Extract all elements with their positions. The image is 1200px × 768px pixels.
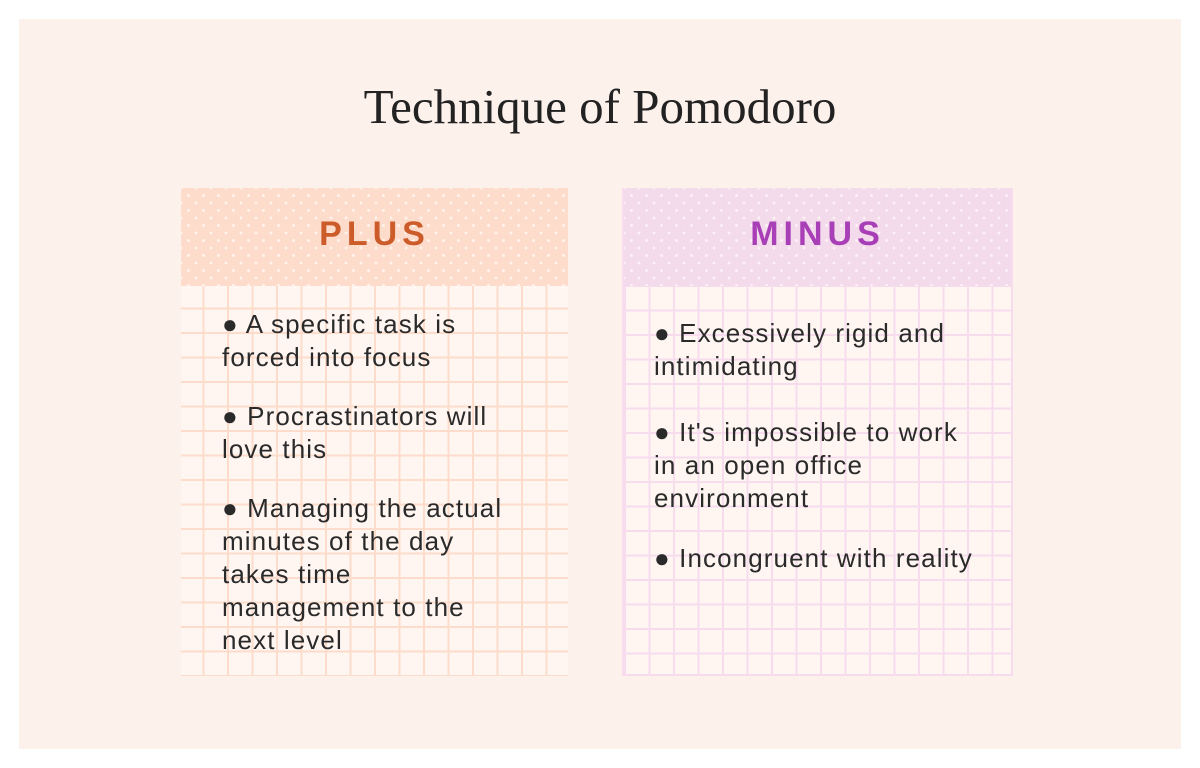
minus header bbox=[624, 188, 1011, 286]
plus items: ● A specific task is bbox=[222, 309, 456, 339]
plus items: ● Managing the actual bbox=[222, 493, 502, 523]
minus items: ● It's impossible to work bbox=[654, 417, 958, 447]
minus items: ● Incongruent with reality bbox=[654, 543, 973, 573]
minus items: in an open office bbox=[654, 450, 863, 480]
plus items: management to the bbox=[222, 592, 465, 622]
title: Technique of Pomodoro bbox=[364, 79, 836, 134]
plus header bbox=[181, 188, 568, 286]
plus items: forced into focus bbox=[222, 342, 431, 372]
plus body grid bbox=[181, 286, 568, 676]
plus items: minutes of the day bbox=[222, 526, 454, 556]
plus items: love this bbox=[222, 434, 327, 464]
panel: plus bbox=[181, 188, 568, 676]
plus items bbox=[222, 309, 502, 655]
plus items: next level bbox=[222, 625, 343, 655]
plus header: PLUS bbox=[319, 214, 430, 252]
minus body grid bbox=[624, 286, 1011, 674]
minus items: environment bbox=[654, 483, 809, 513]
minus items: intimidating bbox=[654, 351, 799, 381]
minus items bbox=[654, 318, 973, 573]
plus items: takes time bbox=[222, 559, 352, 589]
minus header: MINUS bbox=[750, 214, 885, 252]
minus items: ● Excessively rigid and bbox=[654, 318, 945, 348]
panel: minus bbox=[622, 188, 1013, 676]
plus items: ● Procrastinators will bbox=[222, 401, 487, 431]
